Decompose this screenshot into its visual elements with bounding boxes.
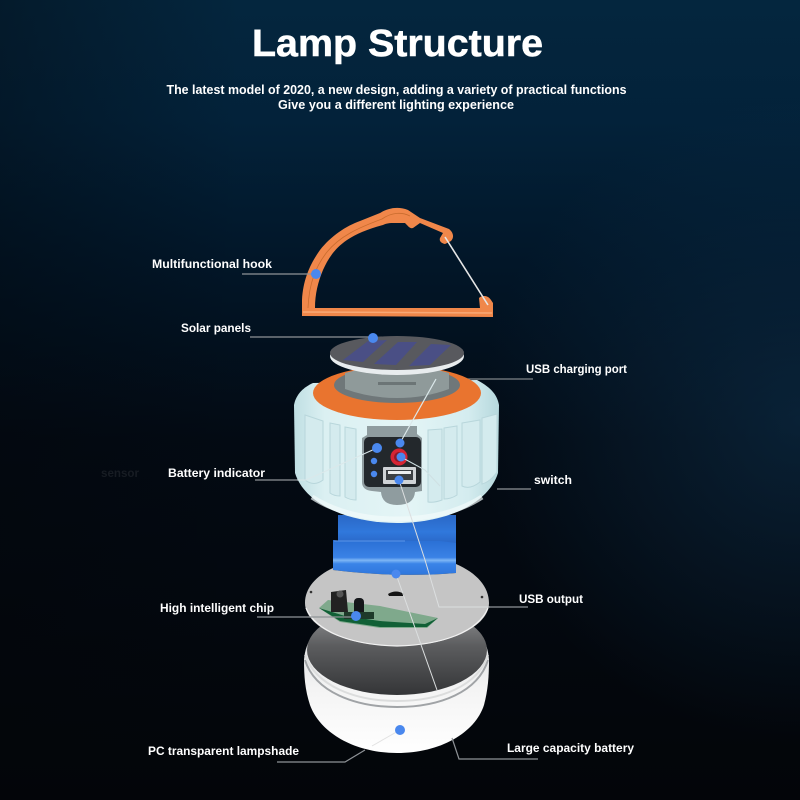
part: orange ring [313,366,481,420]
label: multifunctional hook: Multifunctional hook [152,257,272,271]
labels [148,257,634,758]
part: multifunctional hook [302,208,493,317]
subtitle [166,82,626,112]
part: USB charging port leader line back segment [436,378,533,380]
subtitle: Give you a different lighting experience [278,97,514,112]
label: large capacity battery: Large capacity battery [507,741,634,755]
subtitle: The latest model of 2020, a new design, adding a variety of practical functions [166,82,626,97]
label: USB charging port: USB charging port [526,362,627,376]
label: PC transparent lampshade: PC transparent lampshade [148,744,299,758]
circuit board [319,590,438,628]
part: lampshade [304,605,489,753]
part: lamp body [294,380,499,523]
part: solar panel [330,336,464,375]
leader lines [242,274,538,762]
part: circuit disc [305,564,489,646]
switch button [390,448,408,466]
part: battery [333,515,456,575]
label: solar panels: Solar panels [181,321,251,335]
part: control panel [362,426,422,505]
label: USB output: USB output [519,592,583,606]
USB output socket [383,467,416,484]
label: high intelligent chip: High intelligent chip [160,601,274,615]
label: battery indicator: Battery indicator [168,466,265,480]
title: Lamp Structure [252,23,543,65]
faded stray label: sensor [101,466,139,480]
label: switch: switch [534,473,572,487]
marker dots [311,269,406,735]
